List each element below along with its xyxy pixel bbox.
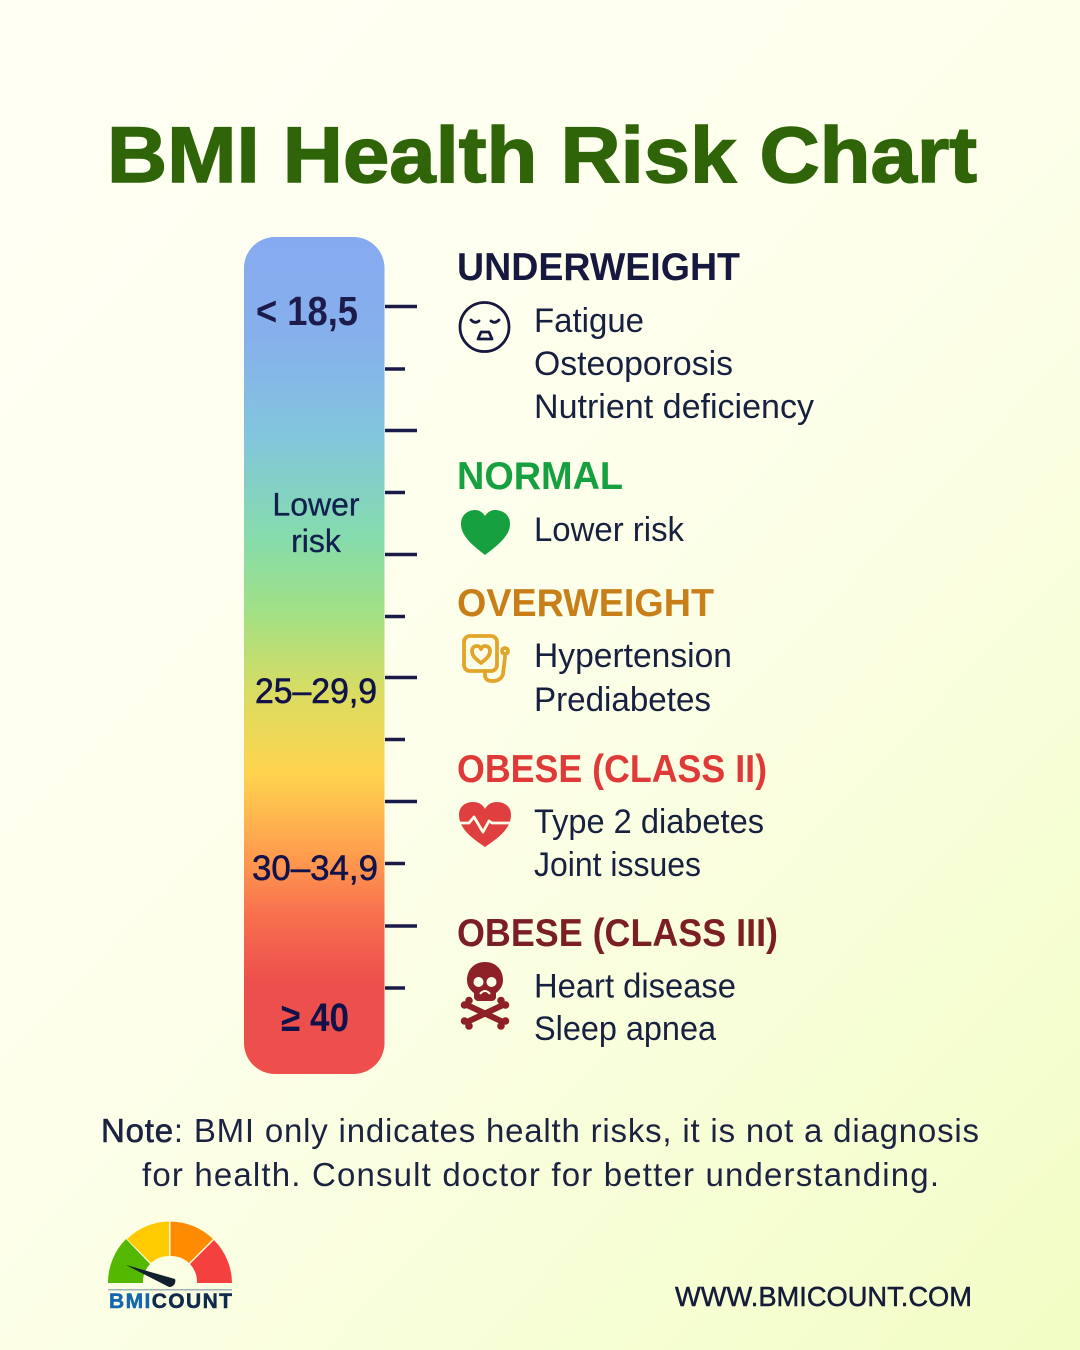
logo: BMICOUNT gauge	[108, 1222, 232, 1313]
gauge needle	[126, 1265, 175, 1287]
note text: Note: BMI only indicates health risks, it is not a diagnosis	[101, 1112, 979, 1149]
risk list: obese class III: Heart disease	[534, 968, 736, 1006]
risk list: obese class II: Type 2 diabetes	[534, 803, 764, 841]
panel: obese class III	[457, 912, 778, 1048]
note text	[101, 1112, 979, 1193]
icon: heart with pulse	[459, 802, 514, 847]
logo wordmark: BMICOUNT	[109, 1290, 232, 1313]
risk list: underweight: Nutrient deficiency	[534, 388, 814, 426]
risk list: obese class III: Sleep apnea	[534, 1010, 716, 1048]
panel: overweight	[457, 582, 732, 719]
panel: normal	[457, 455, 685, 555]
scale label: 30 to 34.9: 30–34,9	[252, 849, 378, 888]
risk list: overweight: Hypertension	[534, 637, 732, 675]
risk list: obese class III	[534, 968, 736, 1048]
risk list: overweight	[534, 637, 732, 719]
scale label: lower risk	[272, 486, 360, 559]
risk list: obese class II: Joint issues	[534, 846, 701, 884]
icon: tired face	[460, 302, 509, 352]
note text: for health. Consult doctor for better understanding.	[142, 1156, 939, 1193]
icon: green heart	[461, 510, 510, 555]
icon: blood pressure monitor	[464, 636, 508, 681]
panel: obese class II	[457, 748, 767, 884]
scale bar	[244, 237, 384, 1074]
risk list: obese class II	[534, 803, 764, 884]
heading: obese class II: OBESE (CLASS II)	[457, 748, 767, 791]
risk list: underweight: Osteoporosis	[534, 345, 733, 383]
risk list: underweight	[534, 302, 814, 426]
risk list: underweight: Fatigue	[534, 302, 644, 340]
scale label: lower risk: risk	[291, 523, 342, 559]
risk text: normal: Lower risk	[534, 511, 685, 549]
scale label: lower risk: Lower	[272, 486, 360, 522]
website url: WWW.BMICOUNT.COM	[675, 1281, 972, 1312]
BMI gradient scale	[244, 237, 417, 1074]
panel: underweight	[457, 246, 814, 426]
title: BMI Health Risk Chart	[107, 110, 977, 199]
logo rule	[108, 1289, 232, 1290]
scale label: 40 and over: ≥ 40	[281, 996, 349, 1040]
icon: skull and crossbones	[461, 962, 509, 1030]
risk list: overweight: Prediabetes	[534, 681, 711, 719]
scale label: 25 to 29.9: 25–29,9	[255, 672, 377, 711]
scale ticks	[385, 306, 417, 988]
heading: overweight: OVERWEIGHT	[457, 582, 714, 625]
heading: underweight: UNDERWEIGHT	[457, 246, 740, 289]
heading: normal: NORMAL	[457, 455, 623, 498]
heading: obese class III: OBESE (CLASS III)	[457, 912, 778, 955]
scale label: under 18.5: < 18,5	[256, 288, 358, 334]
gauge segments	[108, 1239, 150, 1283]
